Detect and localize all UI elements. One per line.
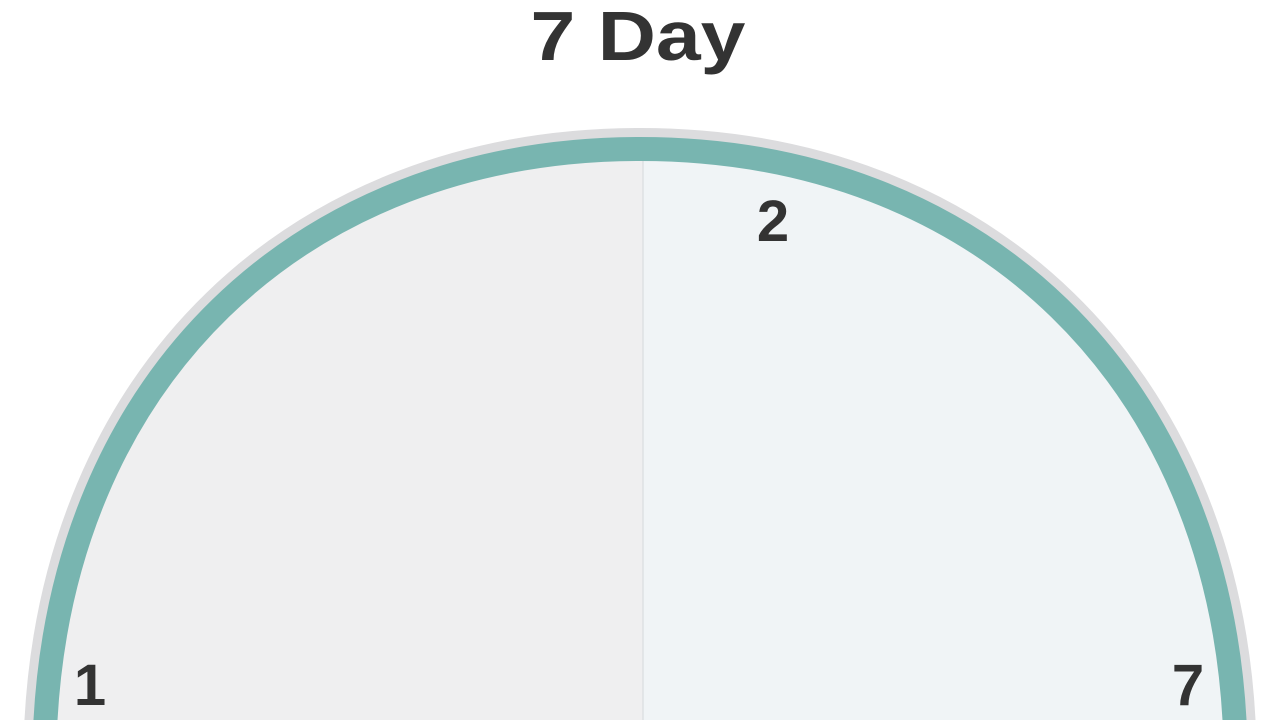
label 7: 7 — [1172, 653, 1204, 718]
dome left half — [58, 161, 642, 720]
dome outer border — [45, 149, 1235, 720]
label 2: 2 — [757, 189, 789, 254]
label 1: 1 — [74, 653, 106, 718]
dome teal arc — [45, 149, 1235, 720]
dome right half — [644, 161, 1222, 720]
